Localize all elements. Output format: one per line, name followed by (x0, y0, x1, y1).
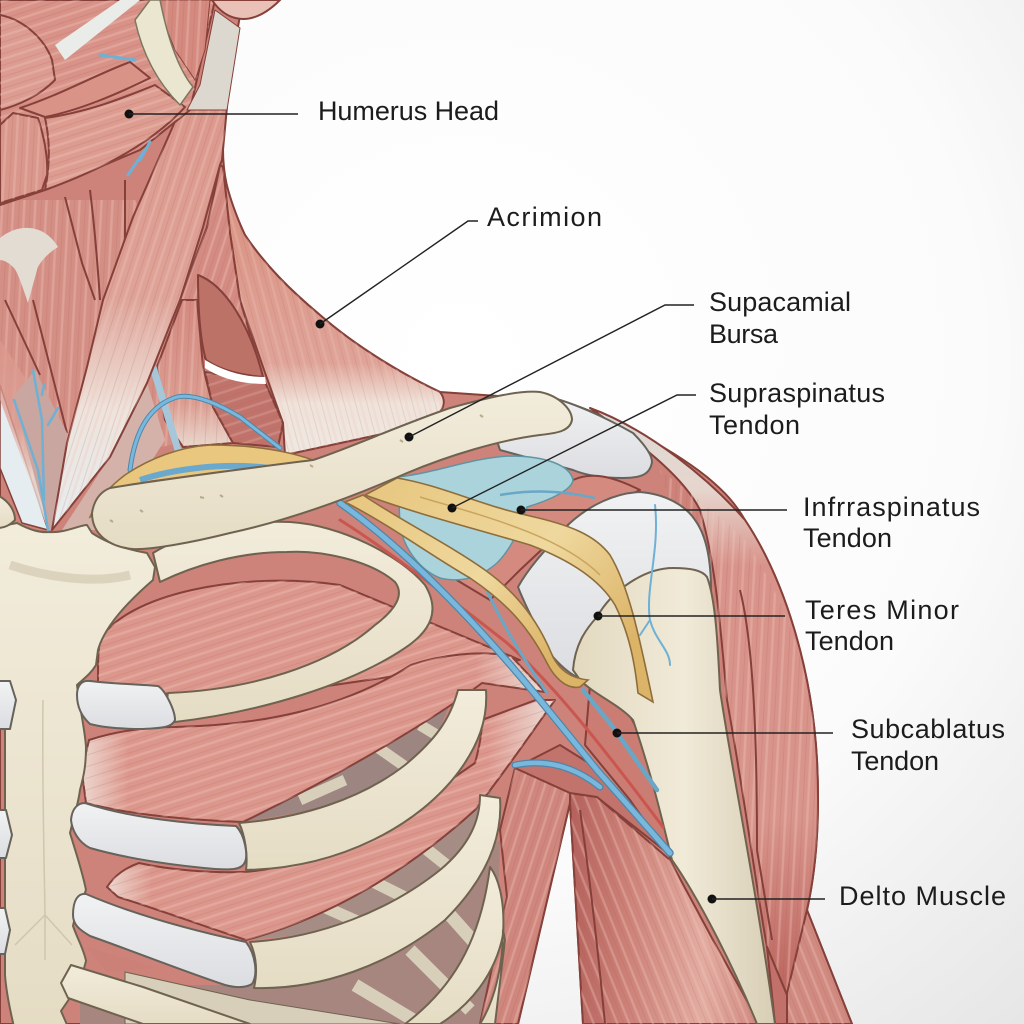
humeral head cartilage (518, 492, 711, 680)
label: Supraspinatus Tendon (448, 378, 885, 512)
label: Infrraspinatus Tendon (516, 492, 980, 553)
label: Supacamial Bursa: Bursa (709, 319, 779, 349)
humerus bone (573, 568, 775, 1024)
deep neck muscles (0, 180, 190, 530)
label: Teres Minor Tendon: Tendon (805, 626, 894, 656)
jaw and upper neck muscle group (0, 0, 280, 205)
label: Teres Minor Tendon: Teres Minor (805, 595, 959, 625)
label: Delto Muscle: Delto Muscle (839, 881, 1006, 911)
chest muscles (82, 581, 555, 972)
label: Acrimion (316, 202, 602, 328)
label: Acrimion: Acrimion (487, 202, 602, 232)
upper rib (153, 522, 432, 722)
costal cartilage (0, 681, 255, 987)
third rib (250, 795, 500, 988)
label: Subcablatus Tendon: Subcablatus (851, 714, 1005, 744)
lower ribs (61, 867, 505, 1024)
scapula acromion cap (490, 395, 652, 478)
supraspinatus and infraspinatus tendons (345, 478, 653, 702)
nerve band behind clavicle (90, 445, 313, 517)
clavicle (92, 392, 572, 549)
trapezius muscle (223, 167, 444, 455)
subacromial bursa (398, 456, 595, 580)
blood vessels (14, 55, 670, 853)
label: Supraspinatus Tendon: Tendon (709, 410, 800, 440)
label: Supacamial Bursa (404, 287, 851, 442)
mid neck muscles (153, 165, 283, 450)
infraspinatus muscle (440, 476, 640, 600)
sternocleidomastoid muscle (52, 107, 227, 530)
rib cage gaps (80, 695, 500, 1024)
label: Subcablatus Tendon: Tendon (851, 746, 939, 776)
deltoid muscle (590, 408, 852, 1024)
label: Infrraspinatus Tendon: Tendon (803, 523, 892, 553)
second rib (239, 690, 486, 870)
label: Infrraspinatus Tendon: Infrraspinatus (803, 492, 980, 522)
sternum (0, 523, 155, 1024)
label: Supraspinatus Tendon: Supraspinatus (709, 378, 885, 408)
arm muscles (480, 685, 760, 1024)
label: Delto Muscle (708, 881, 1006, 911)
label: Subcablatus Tendon (612, 714, 1005, 776)
clavicle left end (0, 495, 15, 528)
label: Teres Minor Tendon (594, 595, 959, 656)
label: Supacamial Bursa: Supacamial (709, 287, 851, 317)
label: Humerus Head (124, 96, 499, 126)
label: Humerus Head: Humerus Head (318, 96, 499, 126)
